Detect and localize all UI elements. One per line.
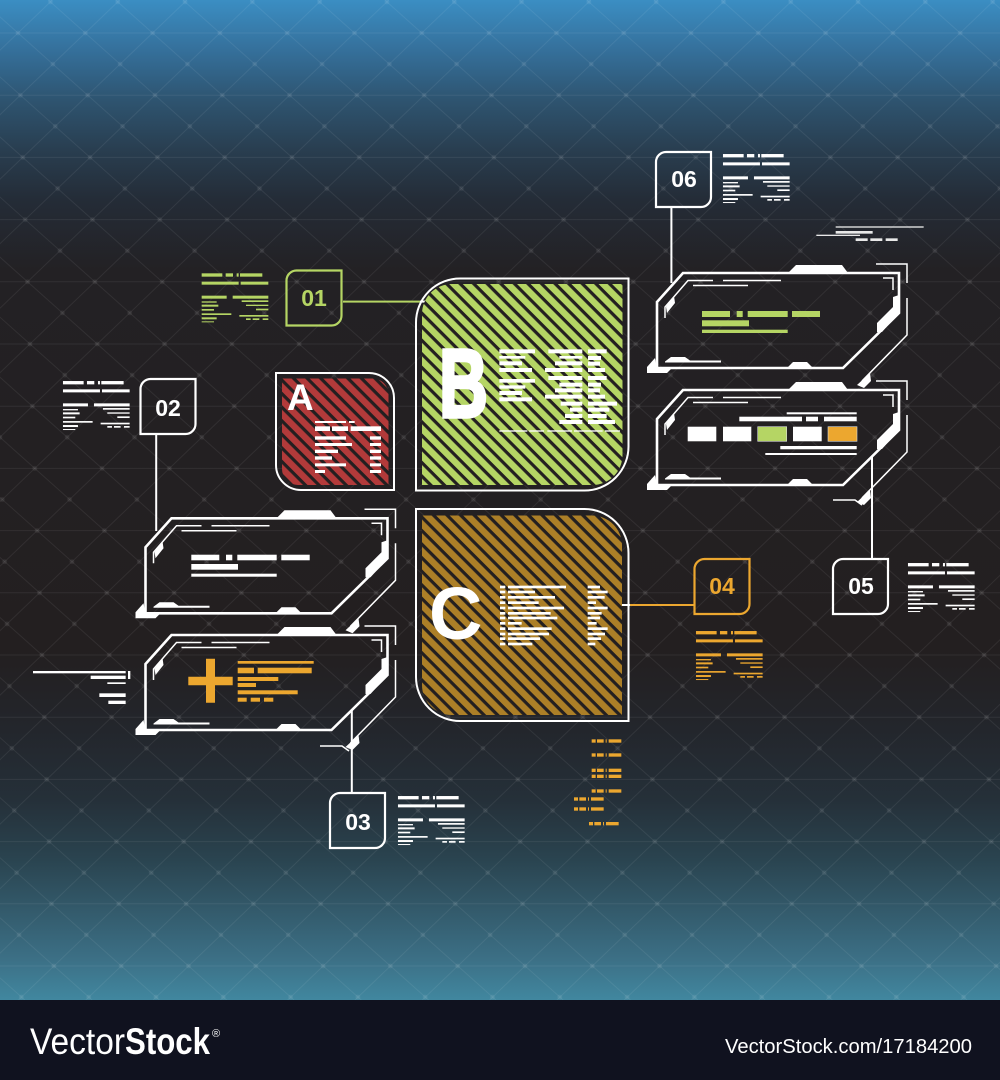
brand logo: Vector [30, 1021, 125, 1062]
connector 02 [155, 435, 157, 531]
text block left [33, 671, 130, 704]
label 03: 03 [345, 809, 371, 835]
label 05 [833, 559, 888, 614]
label 04 [694, 559, 750, 614]
letter C: C [429, 572, 482, 655]
icon: plus [188, 659, 233, 703]
brand logo: ® [212, 1028, 220, 1040]
panel C text lines [500, 586, 608, 645]
panel A text lines [315, 421, 381, 473]
connector 01 [343, 301, 432, 303]
label 01 [286, 270, 342, 326]
label 03 [330, 793, 385, 848]
connector 03 [351, 710, 353, 792]
label 02: 02 [155, 395, 181, 421]
text block 02 [63, 381, 130, 430]
label 06: 06 [671, 166, 697, 192]
HUD frame: plus icon [136, 626, 396, 751]
text block 05 [908, 563, 975, 612]
label 05: 05 [848, 573, 874, 599]
swatches and lines [688, 412, 857, 455]
label 06 [656, 152, 711, 207]
connector 06 [670, 208, 672, 283]
panel C [416, 509, 628, 721]
label 04: 04 [709, 573, 735, 599]
panel B [416, 278, 629, 491]
connector 04 [617, 604, 694, 606]
white bars [191, 555, 310, 577]
orange text bars [238, 661, 314, 702]
green bars [702, 311, 820, 333]
text block 01 [202, 273, 268, 322]
HUD frame: white text [136, 509, 396, 633]
label 01: 01 [301, 285, 327, 311]
brand logo [30, 1021, 220, 1062]
text block top right [816, 226, 924, 241]
brand logo: Stock [125, 1021, 210, 1062]
footer url: VectorStock.com/17184200 [725, 1036, 972, 1058]
text block 04 [696, 631, 763, 680]
footer bar [0, 1000, 1000, 1080]
HUD frame: green text [647, 264, 907, 388]
letter B: B [439, 329, 488, 438]
HUD frame: colour swatches [647, 381, 907, 505]
text block orange column [574, 739, 621, 825]
panel A [276, 373, 394, 490]
text block 03 [398, 796, 465, 845]
panel B text lines [499, 349, 620, 432]
label 02 [140, 379, 196, 434]
connector 05 [871, 457, 873, 558]
letter A: A [287, 377, 314, 418]
text block 06 [723, 154, 790, 203]
